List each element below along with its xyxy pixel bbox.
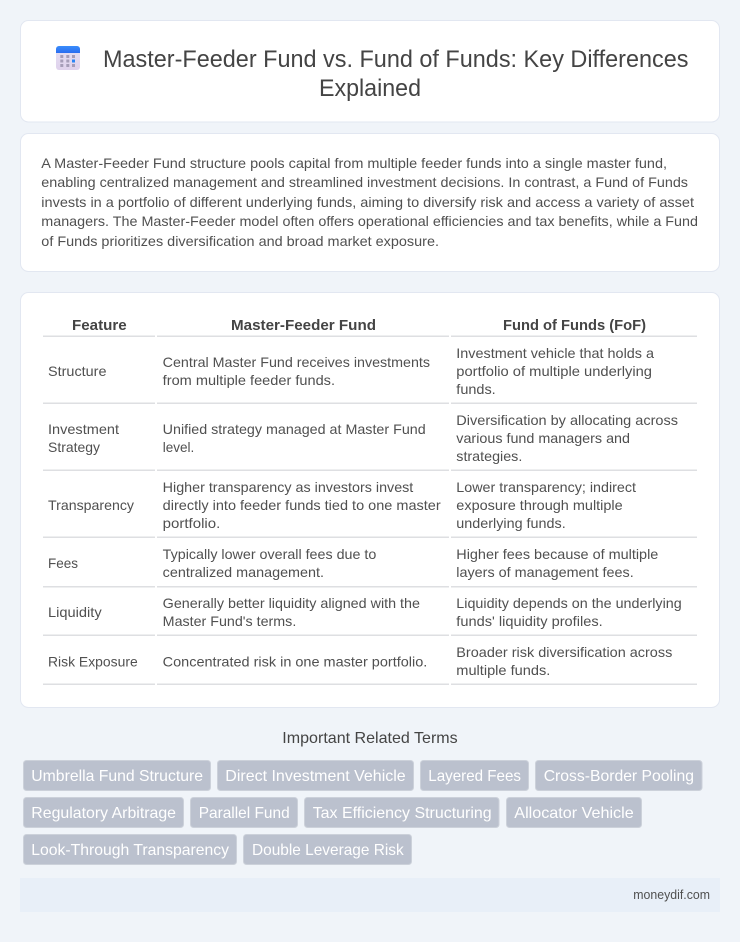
table row: fees: centralized management. [163,564,324,580]
text block: introduction paragraph: of Funds prioritizes diversification and broad market exposure. [41,233,439,249]
table row: investment strategy: strategies. [456,448,522,464]
tag: parallel fund [190,798,298,828]
text block: introduction paragraph: managers. The Master-Feeder model often offers operational efficiencies and tax benefits, while a Fund [41,213,698,229]
table row: investment strategy: level. [163,439,194,455]
tag: direct investment vehicle: Direct Investment Vehicle [225,768,406,785]
table row: structure: Central Master Fund receives investments [163,354,430,370]
tag: allocator vehicle [506,798,642,828]
table row: risk exposure: multiple funds. [456,662,550,678]
tag: parallel fund: Parallel Fund [199,805,290,822]
tag: regulatory arbitrage [24,798,184,828]
panel: introduction [20,134,720,272]
title: Master-Feeder Fund vs. Fund of Funds: Key Differences [103,46,688,73]
tag: cross-border pooling [536,760,702,790]
table header: Master-Feeder Fund [231,318,376,334]
text block: introduction paragraph [41,155,698,249]
tag: direct investment vehicle [218,760,414,790]
table row: liquidity: Master Fund's terms. [163,613,296,629]
tag: look-through transparency [24,834,236,864]
table row: transparency: portfolio. [163,515,220,531]
tag: layered fees [420,760,528,790]
footer [20,878,720,912]
table row: risk exposure: Concentrated risk in one master portfolio. [163,654,427,670]
table row: liquidity [43,595,697,636]
tag: double leverage risk [244,834,412,864]
panel: comparison table [20,292,720,708]
table row: fees: Typically lower overall fees due to [163,546,377,562]
table row: transparency: Transparency [48,497,134,513]
title [103,46,688,102]
title: Explained [319,75,421,102]
table row: structure: from multiple feeder funds. [163,372,335,388]
table row: fees: Fees [48,555,78,571]
tag: cross-border pooling: Cross-Border Pooling [544,768,694,785]
table header [43,318,697,337]
table row: fees: layers of management fees. [456,564,634,580]
table row: investment strategy: Strategy [48,439,100,455]
table row: structure: portfolio of multiple underlying [456,363,652,379]
table row: liquidity: Liquidity depends on the underlying [456,595,682,611]
table row: transparency: Lower transparency; indirect [456,479,636,495]
panel: related term tags [24,760,702,864]
table row: fees: Higher fees because of multiple [456,546,659,562]
text block: introduction paragraph: enabling centralized management and streamlined investment decisions. In contrast, a Fund of Funds [41,174,688,190]
table row: investment strategy [43,412,697,471]
table row: investment strategy: Diversification by allocating across [456,412,678,428]
table row: liquidity: Liquidity [48,604,102,620]
tag: umbrella fund structure: Umbrella Fund Structure [31,768,203,785]
table header: Fund of Funds (FoF) [503,318,646,334]
tag: double leverage risk: Double Leverage Risk [252,842,405,859]
table row: risk exposure: Risk Exposure [48,654,138,670]
tag: look-through transparency: Look-Through Transparency [31,842,229,859]
table row: structure: Investment vehicle that holds a [456,345,654,361]
table row: transparency: directly into feeder funds tied to one master [163,497,441,513]
table row: structure: Structure [48,363,107,379]
heading: important related terms: Important Related Terms [282,730,458,747]
tag: tax efficiency structuring: Tax Efficiency Structuring [313,805,492,822]
tag: tax efficiency structuring [304,798,499,828]
footer: moneydif.com [633,887,710,902]
tag: umbrella fund structure [24,760,210,790]
table row: structure: funds. [456,381,496,397]
text block: introduction paragraph: A Master-Feeder Fund structure pools capital from multiple feeder funds into a single master fund, [41,155,667,171]
table row: investment strategy: various fund managers and [456,430,630,446]
icon: calendar [56,46,80,70]
table row: transparency: Higher transparency as investors invest [163,479,413,495]
table row: structure [43,345,697,404]
table row: transparency: underlying funds. [456,515,566,531]
table row: risk exposure [43,644,697,685]
table row: fees [43,546,697,588]
text block: introduction paragraph: invests in a portfolio of different underlying funds, aiming to diversify risk and access a variety of asset [41,194,694,210]
table row: liquidity: Generally better liquidity aligned with the [163,595,420,611]
tag: regulatory arbitrage: Regulatory Arbitrage [31,805,176,822]
tag: allocator vehicle: Allocator Vehicle [514,805,634,822]
table row: transparency: exposure through multiple [456,497,623,513]
table row: liquidity: funds' liquidity profiles. [456,613,603,629]
table row: investment strategy: Investment [48,421,119,437]
table header: Feature [72,318,127,334]
table row: risk exposure: Broader risk diversification across [456,644,672,660]
table row: investment strategy: Unified strategy managed at Master Fund [163,421,426,437]
table row: transparency [43,479,697,538]
panel: title card [20,20,720,122]
tag: layered fees: Layered Fees [428,768,521,785]
